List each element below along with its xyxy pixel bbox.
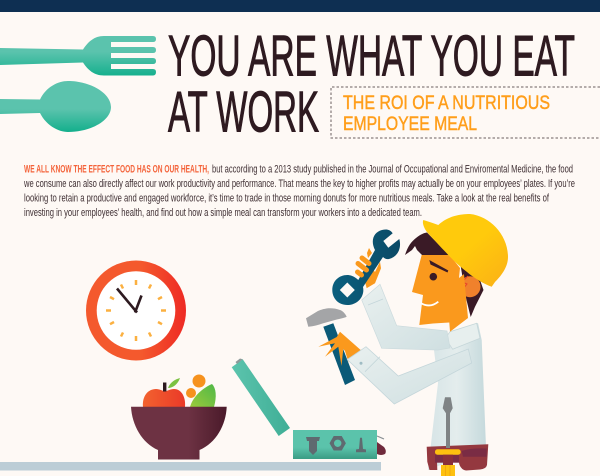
face (412, 253, 468, 332)
hammer head (306, 308, 347, 327)
wrench thumb (367, 248, 372, 258)
icon: clock (86, 260, 186, 360)
icon: toolbox lid (232, 358, 290, 436)
toolbox with screw, nut and nail icons (293, 430, 377, 459)
title (168, 24, 575, 144)
upper hand palm (364, 262, 381, 288)
intro text block (23, 164, 575, 219)
tool belt (427, 444, 488, 470)
subtitle box: EMPLOYEE MEAL (343, 114, 477, 135)
subtitle box (331, 87, 600, 138)
shelf (0, 462, 381, 470)
icon: screwdriver (435, 397, 461, 476)
icon: toolbox handle (377, 436, 386, 455)
torso (428, 323, 486, 470)
icon: fork (0, 36, 156, 76)
intro text block: investing in your employees’ health, and find out how a simple meal can transform your workers into a dedicated team. (24, 207, 422, 219)
intro text block: WE ALL KNOW THE EFFECT FOOD HAS ON OUR HEALTH, (24, 164, 209, 176)
title: AT WORK (168, 80, 319, 144)
worker illustration (306, 214, 508, 476)
icon: wrench (332, 229, 400, 305)
lower arm sleeve (347, 347, 472, 404)
hard hat (423, 214, 508, 287)
upper arm sleeve (362, 284, 450, 350)
lower hand (318, 332, 361, 366)
eyebrow, eye and smile (421, 260, 448, 305)
subtitle box: THE ROI OF A NUTRITIOUS (343, 93, 550, 114)
neck and collar (437, 323, 480, 350)
front hair (405, 232, 449, 255)
hammer handle (323, 323, 355, 385)
fingers on wrench (358, 258, 369, 275)
back hair (460, 262, 484, 317)
ear (460, 276, 480, 297)
top bar (0, 0, 600, 12)
icon: spoon (0, 81, 111, 132)
cuff details (360, 299, 383, 372)
icon: fruit bowl (131, 374, 227, 460)
